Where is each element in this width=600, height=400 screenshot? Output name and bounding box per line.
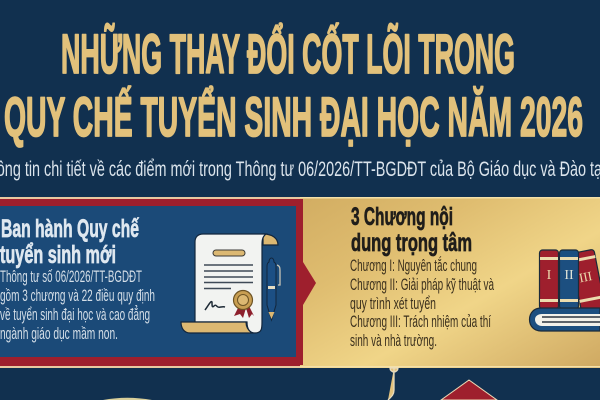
arrow: red pointer [300, 199, 316, 365]
text: regulation description: Thông tư số 06/2026/TT-BGDĐT [0, 267, 142, 286]
text: regulation description: về tuyển sinh đại học và cao đẳng [0, 305, 150, 324]
heading: three chapters: 3 Chương nội [351, 203, 453, 231]
panel: new regulation [0, 197, 300, 368]
heading: new regulation: Ban hành Quy chế [1, 215, 139, 243]
text: chapter list: Chương III: Trách nhiệm của thí [350, 312, 491, 331]
panel: three chapters [300, 197, 600, 368]
icon: books [530, 249, 600, 331]
heading: new regulation [0, 215, 139, 269]
icon: certificate scroll [181, 234, 280, 333]
lying book [530, 308, 600, 331]
text: chapter list: sinh và nhà trường. [350, 331, 437, 350]
text: regulation description: ngành giáo dục mầm non. [0, 324, 118, 343]
text: chapter list: quy trình xét tuyển [350, 294, 436, 313]
text: regulation description [0, 267, 155, 343]
heading: three chapters: dung trọng tâm [351, 229, 472, 257]
text: chapter list: Chương II: Giải pháp kỹ thuật và [350, 275, 494, 294]
book III: III [578, 268, 593, 285]
text: chapter list [350, 256, 494, 350]
title [4, 22, 583, 148]
icon: gold medallion top [103, 398, 152, 400]
book II: II [564, 268, 574, 283]
text: regulation description: gồm 3 chương và 22 điều quy định [0, 286, 155, 305]
heading: new regulation: tuyển sinh mới [0, 241, 116, 269]
book I: I [547, 268, 552, 283]
heading: three chapters [351, 203, 472, 257]
connector line [388, 368, 398, 400]
text: chapter list: Chương I: Nguyên tắc chung [350, 256, 477, 275]
icon: red diamond [441, 380, 497, 400]
